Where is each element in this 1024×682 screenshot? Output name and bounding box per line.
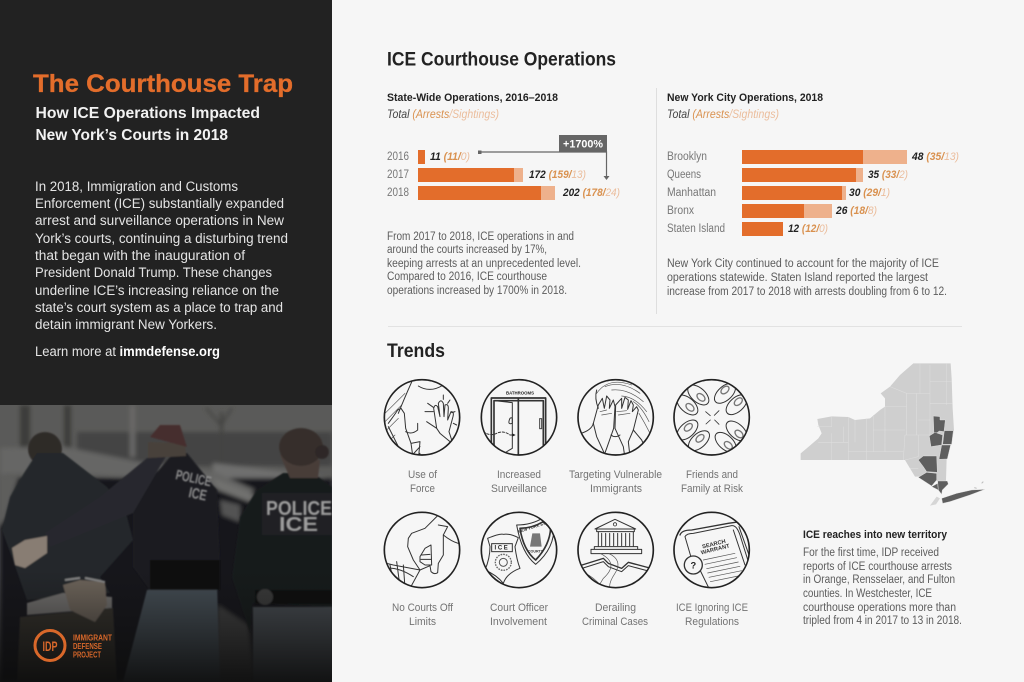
icon: court officer involvement (481, 512, 557, 588)
right officer (232, 473, 332, 633)
intro paragraph: In 2018, Immigration and Customs (35, 179, 238, 194)
section heading: State-Wide Operations, 2016–2018 (387, 92, 558, 104)
cuffed hands (63, 580, 107, 622)
label: Family at Risk (681, 483, 743, 495)
label (676, 602, 748, 628)
subtitle (36, 105, 260, 144)
bar chart: state-wide: 2017 (387, 169, 409, 181)
bar chart: boroughs: Manhattan (667, 187, 716, 199)
body: tripled from 4 in 2017 to 13 in 2018. (803, 615, 962, 627)
body: counties. In Westchester, ICE (803, 588, 932, 600)
intro paragraph: that began with the inauguration of (35, 248, 245, 263)
heading: Trends: Trends (387, 341, 445, 362)
icon: ICE ignoring ICE regulations: SEARCH (702, 539, 726, 551)
logo: Immigrant Defense Project: DEFENSE (73, 642, 103, 651)
bar chart: boroughs: Brooklyn (667, 151, 707, 163)
intro paragraph: arrest and surveillance operations in New (35, 213, 284, 228)
label: Involvement (490, 616, 547, 628)
icon: friends and family at risk (673, 380, 751, 456)
bar chart: state-wide: 172 (159/13) (529, 169, 586, 181)
icon: increased surveillance: BATHROOMS (506, 391, 535, 397)
body (803, 547, 962, 627)
bar chart: state-wide (387, 150, 620, 200)
label: Court Officer (490, 602, 548, 614)
text block: NYC summary (667, 258, 947, 298)
intro paragraph: state’s court system as a place to trap and (35, 300, 283, 315)
label (392, 602, 454, 628)
icon: court officer involvement: NEW YORK STATE (518, 518, 553, 534)
label (681, 469, 743, 495)
panel: New York City operations (667, 92, 959, 298)
intro paragraph: Enforcement (ICE) substantially expanded (35, 196, 284, 211)
learn more link: Learn more at immdefense.org (35, 344, 220, 359)
label: Use of (408, 469, 438, 481)
label: Increased (497, 469, 541, 481)
hand on back (12, 536, 47, 568)
callout: +1700% with arrow (478, 135, 610, 180)
map: New York State counties (801, 363, 985, 506)
intro paragraph: detain immigrant New Yorkers. (35, 317, 217, 332)
label (491, 469, 547, 495)
label: Regulations (685, 616, 739, 628)
body: For the first time, IDP received (803, 547, 939, 559)
label: Targeting Vulnerable (569, 469, 662, 481)
label: No Courts Off (392, 602, 454, 614)
bar chart: state-wide: 2018 (387, 187, 409, 199)
icon: use of force (382, 378, 460, 460)
vest text: POLICE ICE: ICE (187, 484, 208, 505)
text block: state-wide summary: operations increased by 1700% in 2018. (387, 285, 567, 297)
section heading: New York City Operations, 2018 (667, 92, 823, 104)
icon: derailing criminal cases (578, 512, 653, 588)
intro paragraph: President Donald Trump. These changes (35, 265, 272, 280)
panel: left introduction (0, 0, 332, 405)
bar chart: boroughs: Staten Island (667, 223, 725, 235)
bar chart: boroughs: 30 (29/1) (849, 187, 890, 199)
subtitle: New York’s Courts in 2018 (36, 127, 228, 144)
text block: NYC summary: New York City continued to account for the majority of ICE (667, 258, 939, 270)
title: The Courthouse Trap (33, 70, 293, 98)
panel: trends icons (382, 378, 751, 628)
label: Immigrants (590, 483, 642, 495)
middle officer (150, 452, 219, 588)
legend: Total (Arrests/Sightings) (667, 107, 779, 121)
callout: +1700% with arrow: +1700% (563, 138, 603, 150)
label: Friends and (686, 469, 738, 481)
body: courthouse operations more than (803, 602, 956, 614)
label (408, 469, 438, 495)
logo: Immigrant Defense Project (35, 630, 112, 660)
intro paragraph: York’s courts, continuing a disturbing trend (35, 231, 288, 246)
logo: Immigrant Defense Project: PROJECT (73, 650, 101, 660)
icon: increased surveillance (481, 380, 557, 456)
text block: ICE reaches into new territory (803, 529, 962, 627)
label (490, 602, 548, 628)
label: Limits (409, 616, 436, 628)
bar chart: boroughs: 48 (35/13) (911, 151, 959, 163)
logo: Immigrant Defense Project: IDP (42, 638, 58, 654)
logo: Immigrant Defense Project: IMMIGRANT (73, 634, 112, 642)
text block: state-wide summary: From 2017 to 2018, ICE operations in and (387, 231, 574, 243)
bar chart: boroughs: Queens (667, 169, 701, 181)
bar chart: boroughs: 26 (18/8) (835, 205, 877, 217)
label: Surveillance (491, 483, 547, 495)
heading: ICE reaches into new territory (803, 529, 948, 541)
text block: state-wide summary: around the courts increased by 17%, (387, 244, 547, 256)
subtitle: How ICE Operations Impacted (36, 105, 260, 122)
vest text: POLICE ICE: POLICE (174, 466, 213, 489)
label (569, 469, 662, 495)
label (582, 602, 648, 628)
body: in Orange, Rensselaer, and Fulton (803, 574, 955, 586)
bar chart: state-wide: 11 (11/0) (430, 151, 470, 163)
bar chart: boroughs: 35 (33/2) (868, 169, 908, 181)
vest text: POLICE ICE: ICE (279, 514, 318, 536)
icon: court officer involvement: ICE (494, 546, 509, 552)
text block: state-wide summary: Compared to 2016, ICE courthouse (387, 271, 547, 283)
text block: NYC summary: increase from 2017 to 2018 with arrests doubling from 6 to 12. (667, 286, 947, 298)
intro paragraph (35, 179, 288, 332)
text block: state-wide summary (387, 231, 581, 297)
icon: ICE ignoring ICE regulations (674, 512, 749, 588)
panel: state-wide operations (387, 92, 620, 297)
label: ICE Ignoring ICE (676, 602, 748, 614)
body: reports of ICE courthouse arrests (803, 561, 952, 573)
legend: Total (Arrests/Sightings) (387, 107, 499, 121)
icon: no courts off limits (384, 512, 460, 588)
icon: court officer involvement: COURTS (528, 550, 544, 554)
text block: NYC summary: operations statewide. Staten Island reported the largest (667, 272, 929, 284)
intro paragraph: underline ICE’s increasing reliance on the (35, 283, 279, 298)
text block: state-wide summary: keeping arrests at an unprecedented level. (387, 258, 581, 270)
vest text: POLICE ICE (174, 466, 332, 536)
photo: ICE officers arresting a man (0, 405, 332, 682)
bar chart: state-wide: 2016 (387, 151, 409, 163)
icon: ICE ignoring ICE regulations: WARRANT (700, 543, 731, 556)
bar chart: boroughs (667, 150, 959, 236)
vest text: POLICE ICE: POLICE (266, 498, 332, 520)
label: Force (410, 483, 435, 495)
icon: targeting vulnerable immigrants (577, 380, 653, 460)
bar chart: boroughs: Bronx (667, 205, 694, 217)
label: Criminal Cases (582, 616, 648, 628)
bar chart: state-wide: 202 (178/24) (562, 187, 620, 199)
icon: ICE ignoring ICE regulations: ? (690, 560, 696, 570)
label: Derailing (595, 602, 636, 614)
bar chart: boroughs: 12 (12/0) (788, 223, 828, 235)
man in hoodie (28, 432, 62, 460)
heading: ICE Courthouse Operations: ICE Courthouse Operations (387, 50, 616, 70)
